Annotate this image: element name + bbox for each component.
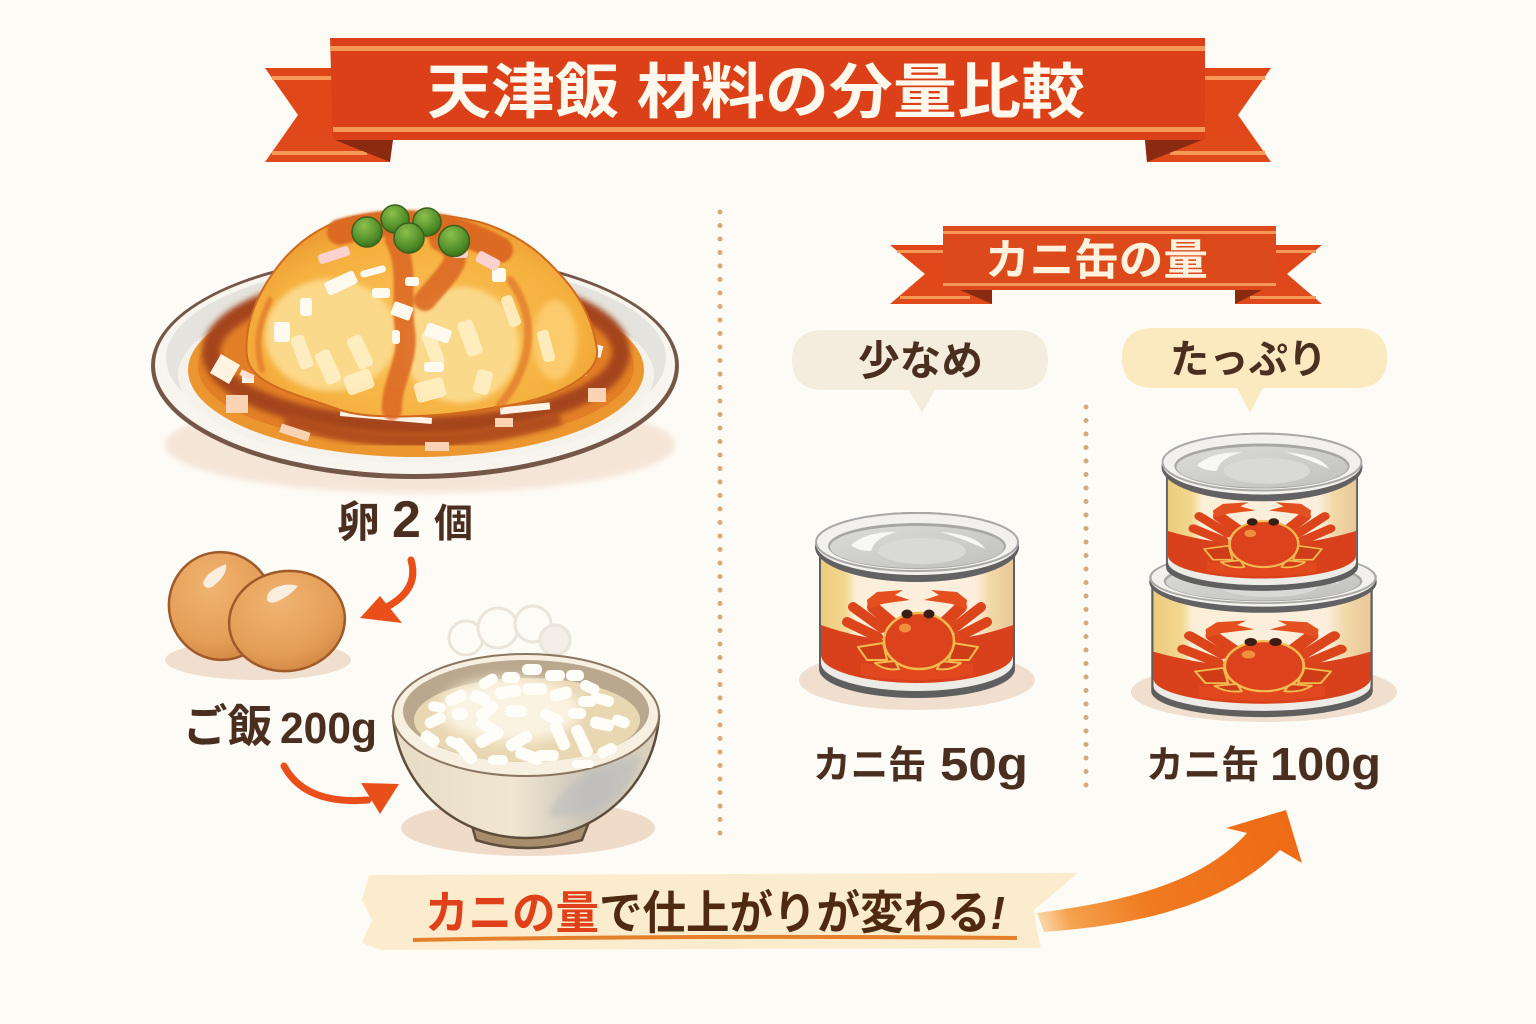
label: can 100g: カニ缶 [1146, 745, 1259, 787]
steam [449, 606, 570, 655]
big arrow [1037, 810, 1302, 932]
sauce pool [188, 283, 644, 457]
label: can 50g: カニ缶 [813, 745, 926, 787]
speech bubble: large amount: たっぷり [1170, 338, 1327, 382]
arrow to bowl [284, 766, 399, 814]
rice grains [418, 664, 631, 768]
label: can 100g [1146, 738, 1381, 790]
omelet dome [246, 213, 597, 416]
divider: center [718, 212, 722, 838]
sub banner [890, 226, 1322, 304]
label: rice amount [183, 701, 377, 753]
label: can 50g [813, 738, 1028, 790]
sub banner text: カニ缶の量 [985, 237, 1208, 285]
label: rice amount: ご飯 [183, 701, 272, 752]
icon: stacked crab cans [1131, 433, 1397, 722]
icon: eggs [159, 542, 351, 680]
arrow to eggs [360, 560, 413, 623]
callout strip [362, 873, 1078, 950]
callout text: カニの量で仕上がりが変わる! [425, 887, 1005, 939]
bowl shading [548, 758, 640, 817]
label: can 100g: 100g [1270, 738, 1381, 790]
title text: 天津飯 材料の分量比較 [427, 59, 1085, 126]
peas [352, 205, 470, 256]
title banner [265, 38, 1271, 162]
icon: single crab can [799, 512, 1035, 710]
speech bubble: small amount: 少なめ [858, 338, 983, 384]
speech bubble: large amount [1122, 328, 1387, 413]
icon: rice bowl [393, 606, 659, 856]
label: eggs amount: 卵 [337, 499, 380, 547]
label: eggs amount: 個 [434, 503, 473, 546]
label: can 50g: 50g [940, 738, 1028, 790]
divider: cans [1084, 407, 1088, 795]
speech bubble: small amount [792, 330, 1048, 413]
omelet rice dish [151, 205, 679, 493]
label: eggs amount: 2 [392, 491, 421, 549]
label: rice amount: 200g [280, 704, 377, 753]
